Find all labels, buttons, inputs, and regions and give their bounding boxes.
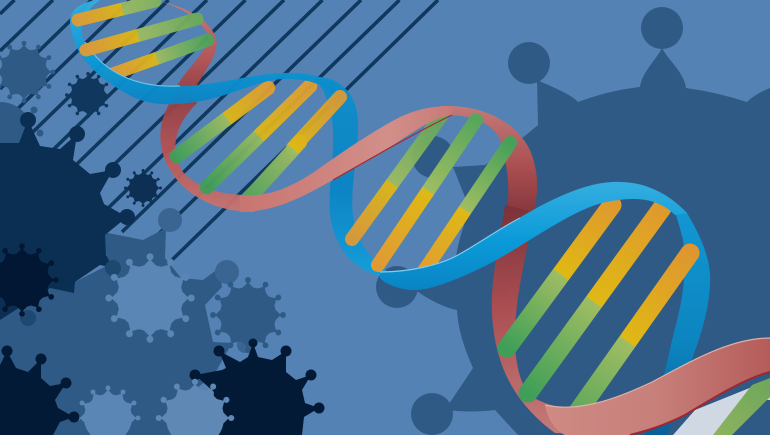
large virus silhouette, right	[376, 7, 770, 435]
first rung, third turn	[352, 115, 442, 239]
mid-tone virus right	[210, 277, 286, 353]
left mid-tone virus	[0, 102, 44, 168]
small dark virus	[65, 72, 111, 118]
light virus bottom right	[156, 379, 234, 435]
blue strand, front lower	[380, 182, 687, 290]
second and third rungs, third turn	[378, 120, 510, 280]
small near-black virus	[0, 243, 59, 317]
first and second rungs, first turn	[78, 1, 197, 50]
light virus bottom	[75, 385, 141, 435]
third rung, second turn	[293, 97, 340, 148]
small dark virus lower	[124, 169, 162, 207]
blue strand, right vertical	[645, 213, 710, 435]
red strand, front lower	[545, 338, 770, 435]
red strand, front middle	[240, 106, 452, 212]
big navy virus	[0, 112, 135, 320]
third rung, first turn	[110, 40, 208, 75]
white gap and green rung, bottom right	[673, 378, 770, 435]
red strand, left curve	[160, 86, 255, 212]
black virus bottom left	[0, 346, 80, 435]
DNA back strands	[148, 0, 710, 435]
black virus bottom centre	[190, 338, 324, 435]
red strand, middle arc	[440, 106, 537, 215]
blue strand, upper vertical	[318, 77, 388, 278]
blue strand, front upper left	[70, 0, 343, 104]
base-pair rungs, fourth turn	[507, 205, 690, 420]
light virus centre	[105, 253, 195, 343]
diagonal stripes	[0, 0, 438, 260]
top-left virus	[0, 41, 55, 103]
mid-tone large virus, lower left	[0, 208, 253, 435]
red strand, lower vertical	[492, 205, 600, 435]
virus ball tips	[20, 260, 121, 326]
base-pair rungs, second turn	[177, 86, 310, 197]
red strand, top loop	[148, 0, 217, 97]
